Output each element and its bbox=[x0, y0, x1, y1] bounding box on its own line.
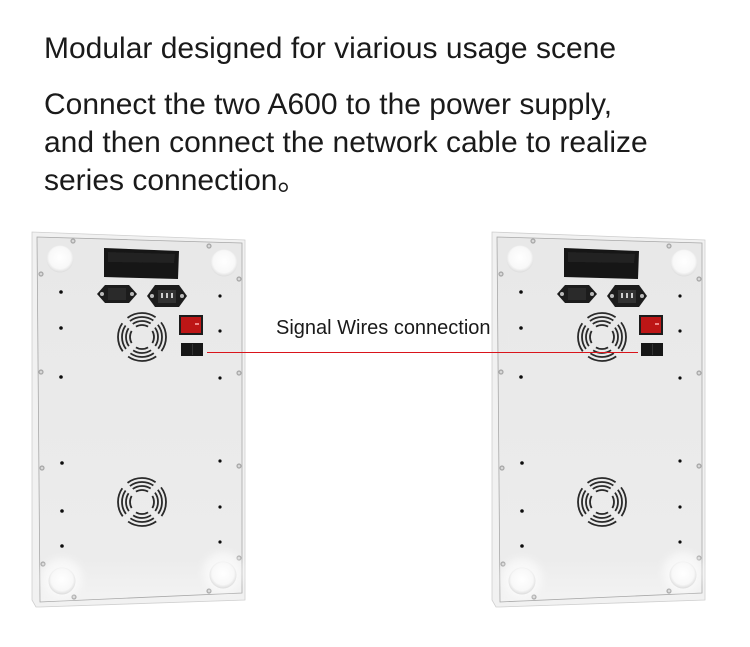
signal port bbox=[181, 343, 203, 356]
screws bbox=[498, 238, 702, 600]
right cabinet bbox=[492, 232, 705, 607]
mounting holes bbox=[519, 290, 682, 548]
signal wire line bbox=[207, 352, 638, 354]
heading: Modular designed for viarious usage scene bbox=[44, 32, 616, 65]
red switch bbox=[179, 315, 203, 335]
back panel bbox=[497, 237, 702, 602]
power sockets bbox=[97, 285, 187, 307]
signal port bbox=[641, 343, 663, 356]
cabinet body bbox=[492, 232, 705, 607]
signal wire label: Signal Wires connection bbox=[276, 317, 491, 339]
rubber feet bbox=[42, 246, 243, 598]
handle bbox=[564, 248, 639, 279]
lower fan bbox=[118, 478, 166, 526]
lower fan bbox=[578, 478, 626, 526]
description text: and then connect the network cable to realize bbox=[44, 126, 648, 159]
upper fan bbox=[118, 313, 166, 361]
back panel bbox=[37, 237, 242, 602]
cabinet body bbox=[32, 232, 245, 607]
handle bbox=[104, 248, 179, 279]
mounting holes bbox=[59, 290, 222, 548]
left cabinet bbox=[32, 232, 245, 607]
screws bbox=[38, 238, 242, 600]
red switch bbox=[639, 315, 663, 335]
description text: Connect the two A600 to the power supply, bbox=[44, 88, 612, 121]
description text bbox=[44, 88, 648, 197]
power sockets bbox=[557, 285, 647, 307]
rubber feet bbox=[502, 246, 703, 598]
description text: series connection。 bbox=[44, 164, 307, 197]
upper fan bbox=[578, 313, 626, 361]
